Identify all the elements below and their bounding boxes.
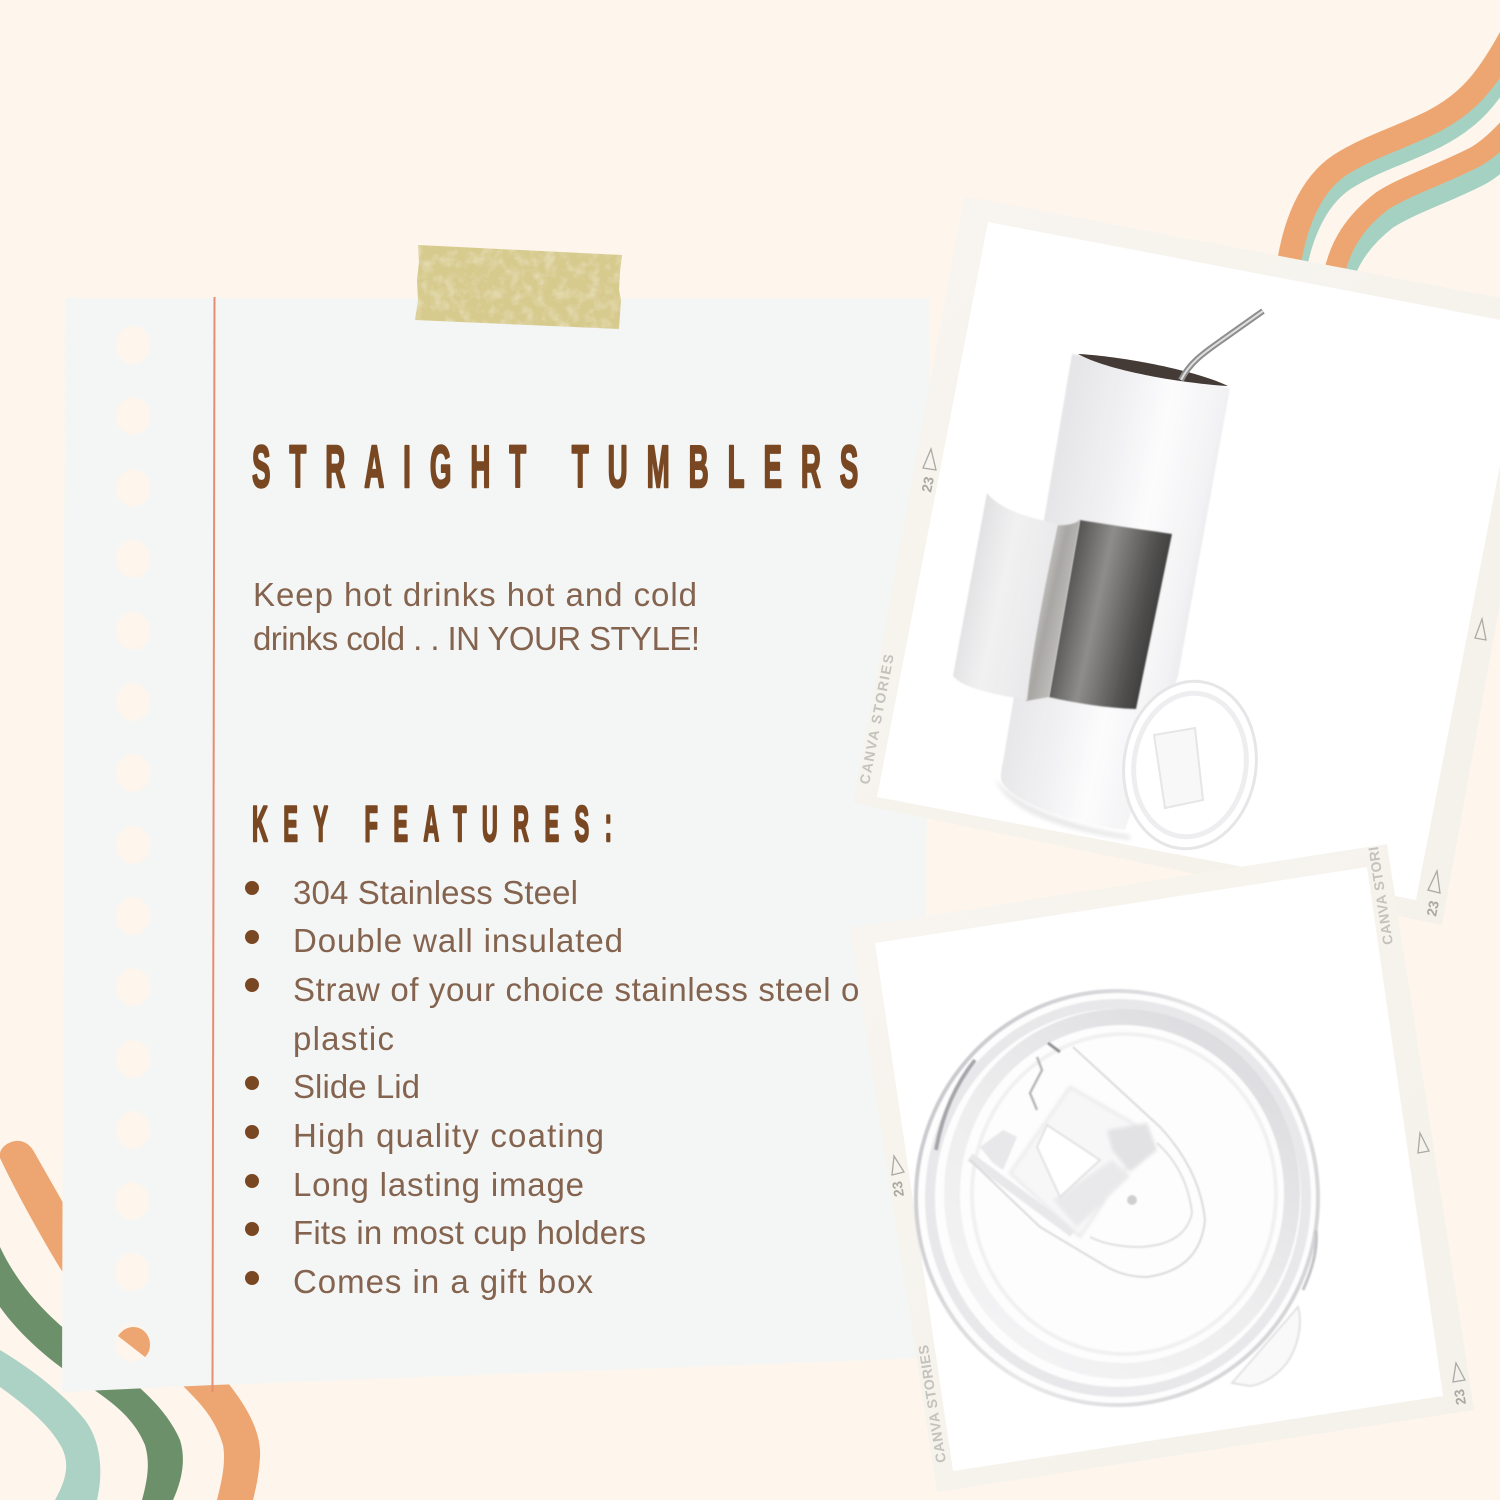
panel: notebook paper	[62, 297, 930, 1392]
lid tab	[1232, 1307, 1300, 1386]
washi tape	[415, 245, 622, 329]
feature list: Double wall insulated	[293, 922, 623, 959]
feature list: High quality coating	[293, 1117, 604, 1154]
punched holes	[115, 326, 150, 1362]
rim opening	[1078, 354, 1228, 386]
photo frame: slide lid: 23	[1451, 1388, 1469, 1406]
photo frame: slide lid	[850, 844, 1474, 1492]
feature list: Slide Lid	[293, 1068, 420, 1105]
shadow	[995, 778, 1130, 840]
small lid	[1113, 673, 1267, 857]
folded steel edge	[1026, 520, 1080, 701]
intro text: Keep hot drinks hot and cold	[253, 576, 697, 613]
decorative waves: bottom left	[0, 1141, 260, 1500]
interior opening: dark steel	[1049, 520, 1172, 709]
feature list: plastic	[293, 1020, 394, 1057]
diagonal base bar	[970, 1157, 1073, 1233]
feature list: 304 Stainless Steel	[293, 874, 578, 911]
photo frame: tumbler	[853, 196, 1500, 925]
slider U outline	[970, 1047, 1205, 1277]
dark highlight on rim	[936, 1060, 975, 1150]
clear lid illustration	[916, 991, 1318, 1405]
tumbler body	[1001, 354, 1230, 830]
heading: key features: KEY FEATURES:	[252, 797, 612, 853]
feature list: Fits in most cup holders	[293, 1214, 646, 1251]
photo frame: slide lid: 23	[889, 1180, 907, 1198]
photo frame: tumbler: CANVA STORIES	[856, 653, 897, 786]
outer rim	[916, 991, 1318, 1405]
feature list: Straw of your choice stainless steel or	[293, 971, 871, 1008]
photo frame: tumbler: 23	[1423, 899, 1442, 918]
photo frame: slide lid: CANVA STORI	[1365, 846, 1396, 946]
title: STRAIGHT TUMBLERS	[252, 433, 858, 500]
feature list: Comes in a gift box	[293, 1263, 594, 1300]
intro text: drinks cold . . IN YOUR STYLE!	[253, 620, 700, 657]
slider left blob	[980, 1130, 1017, 1170]
photo frame: slide lid: CANVA STORIES	[915, 1344, 949, 1464]
margin line	[212, 297, 214, 1392]
photo frame: tumbler: 23	[918, 475, 937, 494]
intro text	[253, 576, 700, 657]
decorative waves: top right	[1288, 35, 1500, 293]
slider mechanism	[1010, 1087, 1157, 1237]
straw	[1181, 311, 1263, 380]
feature list: Long lasting image	[293, 1166, 584, 1203]
hole showing orange wave	[118, 1327, 150, 1357]
feature list	[245, 874, 871, 1300]
tumbler illustration	[953, 311, 1267, 857]
vent hole	[1127, 1195, 1137, 1205]
squiggle and notch	[1030, 1057, 1042, 1110]
peeled white flap	[953, 493, 1058, 700]
